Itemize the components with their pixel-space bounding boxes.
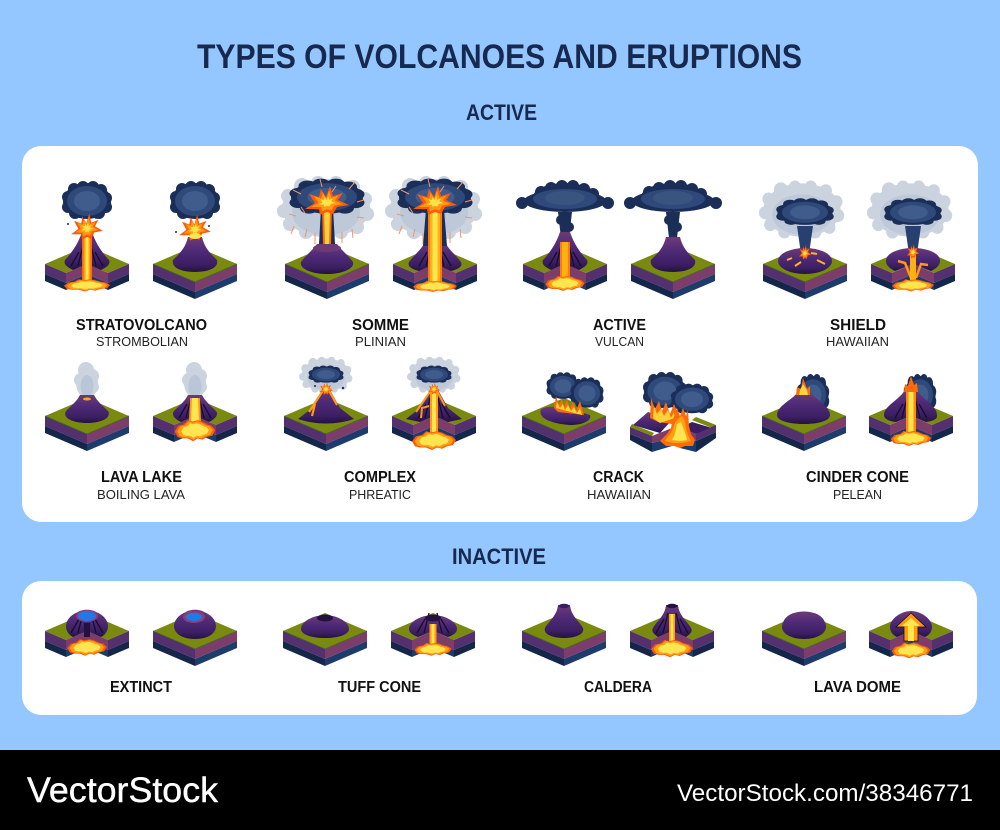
title: TYPES OF VOLCANOES AND ERUPTIONS — [197, 38, 802, 76]
volcano: crack fissure cross-section — [630, 372, 716, 452]
label: STRATOVOLCANO: STRATOVOLCANO — [76, 317, 207, 334]
label: EXTINCT: EXTINCT — [110, 679, 172, 696]
heading: active: ACTIVE — [466, 100, 537, 125]
volcano: stratovolcano cross-section — [45, 181, 129, 291]
volcano: cinder cone exterior — [762, 374, 846, 451]
volcano: shield exterior — [759, 181, 847, 299]
volcano: shield cross-section — [867, 181, 955, 291]
volcano: lava dome cross-section — [869, 611, 953, 658]
volcano: active cross-section — [516, 180, 614, 291]
volcano: crack fissure exterior — [522, 372, 606, 451]
label: CINDER CONE: CINDER CONE — [806, 469, 909, 486]
volcano: lava lake cross-section — [153, 362, 237, 442]
volcano: somme cross-section — [385, 176, 482, 292]
volcano: stratovolcano exterior — [153, 181, 237, 299]
label: SOMME: SOMME — [352, 317, 409, 334]
panel background — [22, 146, 978, 522]
volcano: cinder cone cross-section — [869, 374, 953, 446]
footer background — [0, 750, 1000, 830]
volcano: tuff cone cross-section — [391, 613, 475, 657]
label: LAVA LAKE: LAVA LAKE — [101, 469, 182, 486]
label: ACTIVE: ACTIVE — [593, 317, 646, 334]
label: COMPLEX: COMPLEX — [344, 469, 417, 486]
label: TUFF CONE: TUFF CONE — [338, 679, 421, 696]
label: CRACK: CRACK — [593, 469, 645, 486]
volcano: extinct exterior — [153, 610, 237, 666]
volcano: tuff cone exterior — [283, 613, 367, 666]
volcano: complex cross-section — [392, 357, 476, 450]
volcano: caldera exterior — [522, 604, 606, 666]
volcano: active exterior — [624, 180, 722, 299]
volcano: lava dome exterior — [762, 612, 846, 666]
label: VULCAN: VULCAN — [595, 334, 644, 349]
label: HAWAIIAN: HAWAIIAN — [587, 487, 651, 502]
heading: inactive: INACTIVE — [452, 544, 546, 569]
volcano: complex exterior — [284, 357, 368, 451]
label: HAWAIIAN: HAWAIIAN — [826, 334, 889, 349]
label: STROMBOLIAN: STROMBOLIAN — [96, 334, 188, 349]
label: PELEAN: PELEAN — [833, 487, 882, 502]
label: BOILING LAVA: BOILING LAVA — [97, 487, 185, 502]
panel background — [22, 581, 977, 715]
label: LAVA DOME: LAVA DOME — [814, 679, 901, 696]
footer bar — [0, 750, 1000, 830]
volcano: somme exterior — [277, 176, 374, 299]
label: CALDERA: CALDERA — [584, 679, 652, 696]
footer logo: VectorStock — [27, 771, 219, 810]
panel: inactive volcanoes — [22, 581, 977, 715]
volcano: lava lake exterior — [45, 362, 129, 451]
volcano: extinct cross-section — [45, 610, 129, 657]
volcano: caldera cross-section — [630, 604, 714, 657]
panel: active volcanoes — [22, 146, 978, 522]
label: SHIELD: SHIELD — [830, 317, 886, 334]
label: PLINIAN: PLINIAN — [355, 334, 406, 349]
label: PHREATIC: PHREATIC — [349, 487, 411, 502]
footer url: VectorStock.com/38346771 — [677, 780, 973, 807]
